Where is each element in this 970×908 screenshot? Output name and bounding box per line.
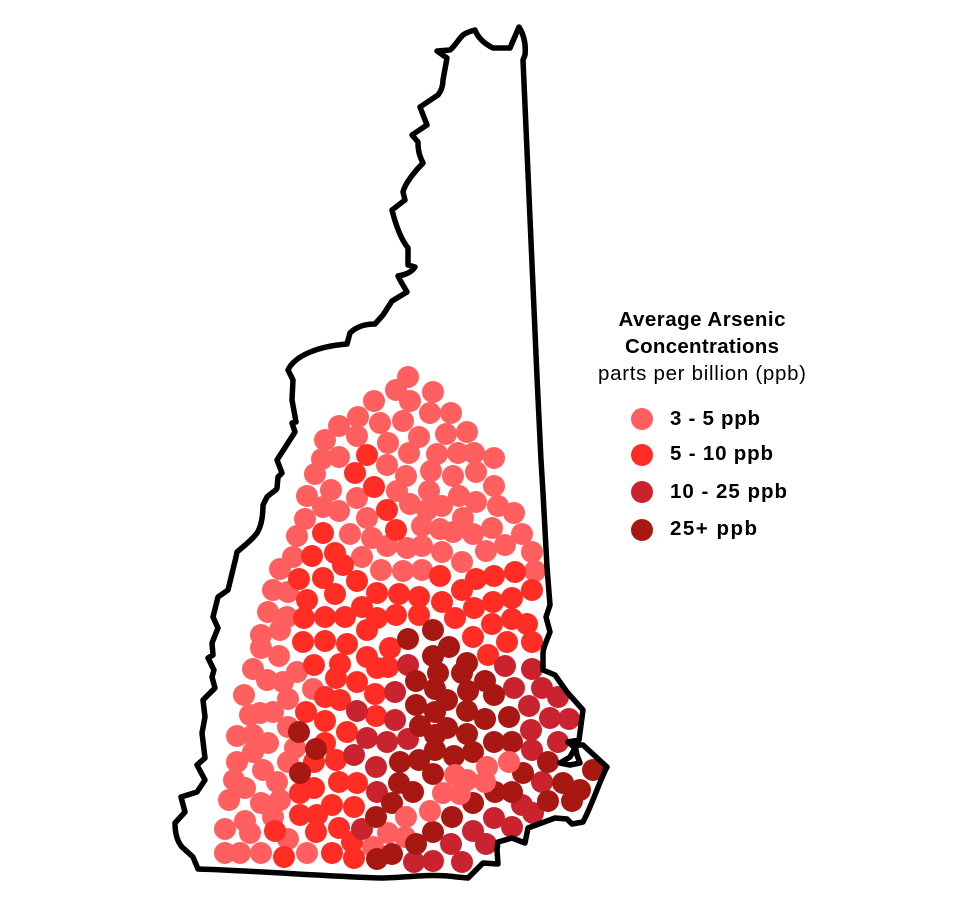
legend item: 3-5 ppb bbox=[631, 407, 760, 430]
legend item: 3-5 ppb: 3 - 5 ppb bbox=[670, 407, 760, 430]
state outline: New Hampshire bbox=[175, 27, 607, 878]
legend item: 10-25 ppb: 10 - 25 ppb bbox=[670, 480, 787, 503]
legend title bbox=[598, 308, 806, 385]
legend title: Average Arsenic bbox=[618, 308, 786, 331]
legend item: 25+ ppb bbox=[631, 517, 757, 541]
dots: 10-25 ppb bbox=[343, 654, 580, 873]
dots: 5-10 ppb bbox=[264, 444, 543, 869]
dots: 3-5 ppb bbox=[214, 366, 546, 864]
legend item: 5-10 ppb bbox=[631, 442, 773, 466]
legend title: parts per billion (ppb) bbox=[598, 362, 806, 385]
legend title: Concentrations bbox=[625, 335, 779, 358]
legend bbox=[598, 308, 806, 541]
legend item: 5-10 ppb: 5 - 10 ppb bbox=[670, 442, 773, 465]
dots: 25+ ppb bbox=[288, 619, 604, 870]
map dots: arsenic concentration bbox=[214, 366, 604, 873]
dots: light overlays in the southeast bbox=[395, 751, 520, 828]
legend item: 25+ ppb: 25+ ppb bbox=[670, 517, 757, 540]
